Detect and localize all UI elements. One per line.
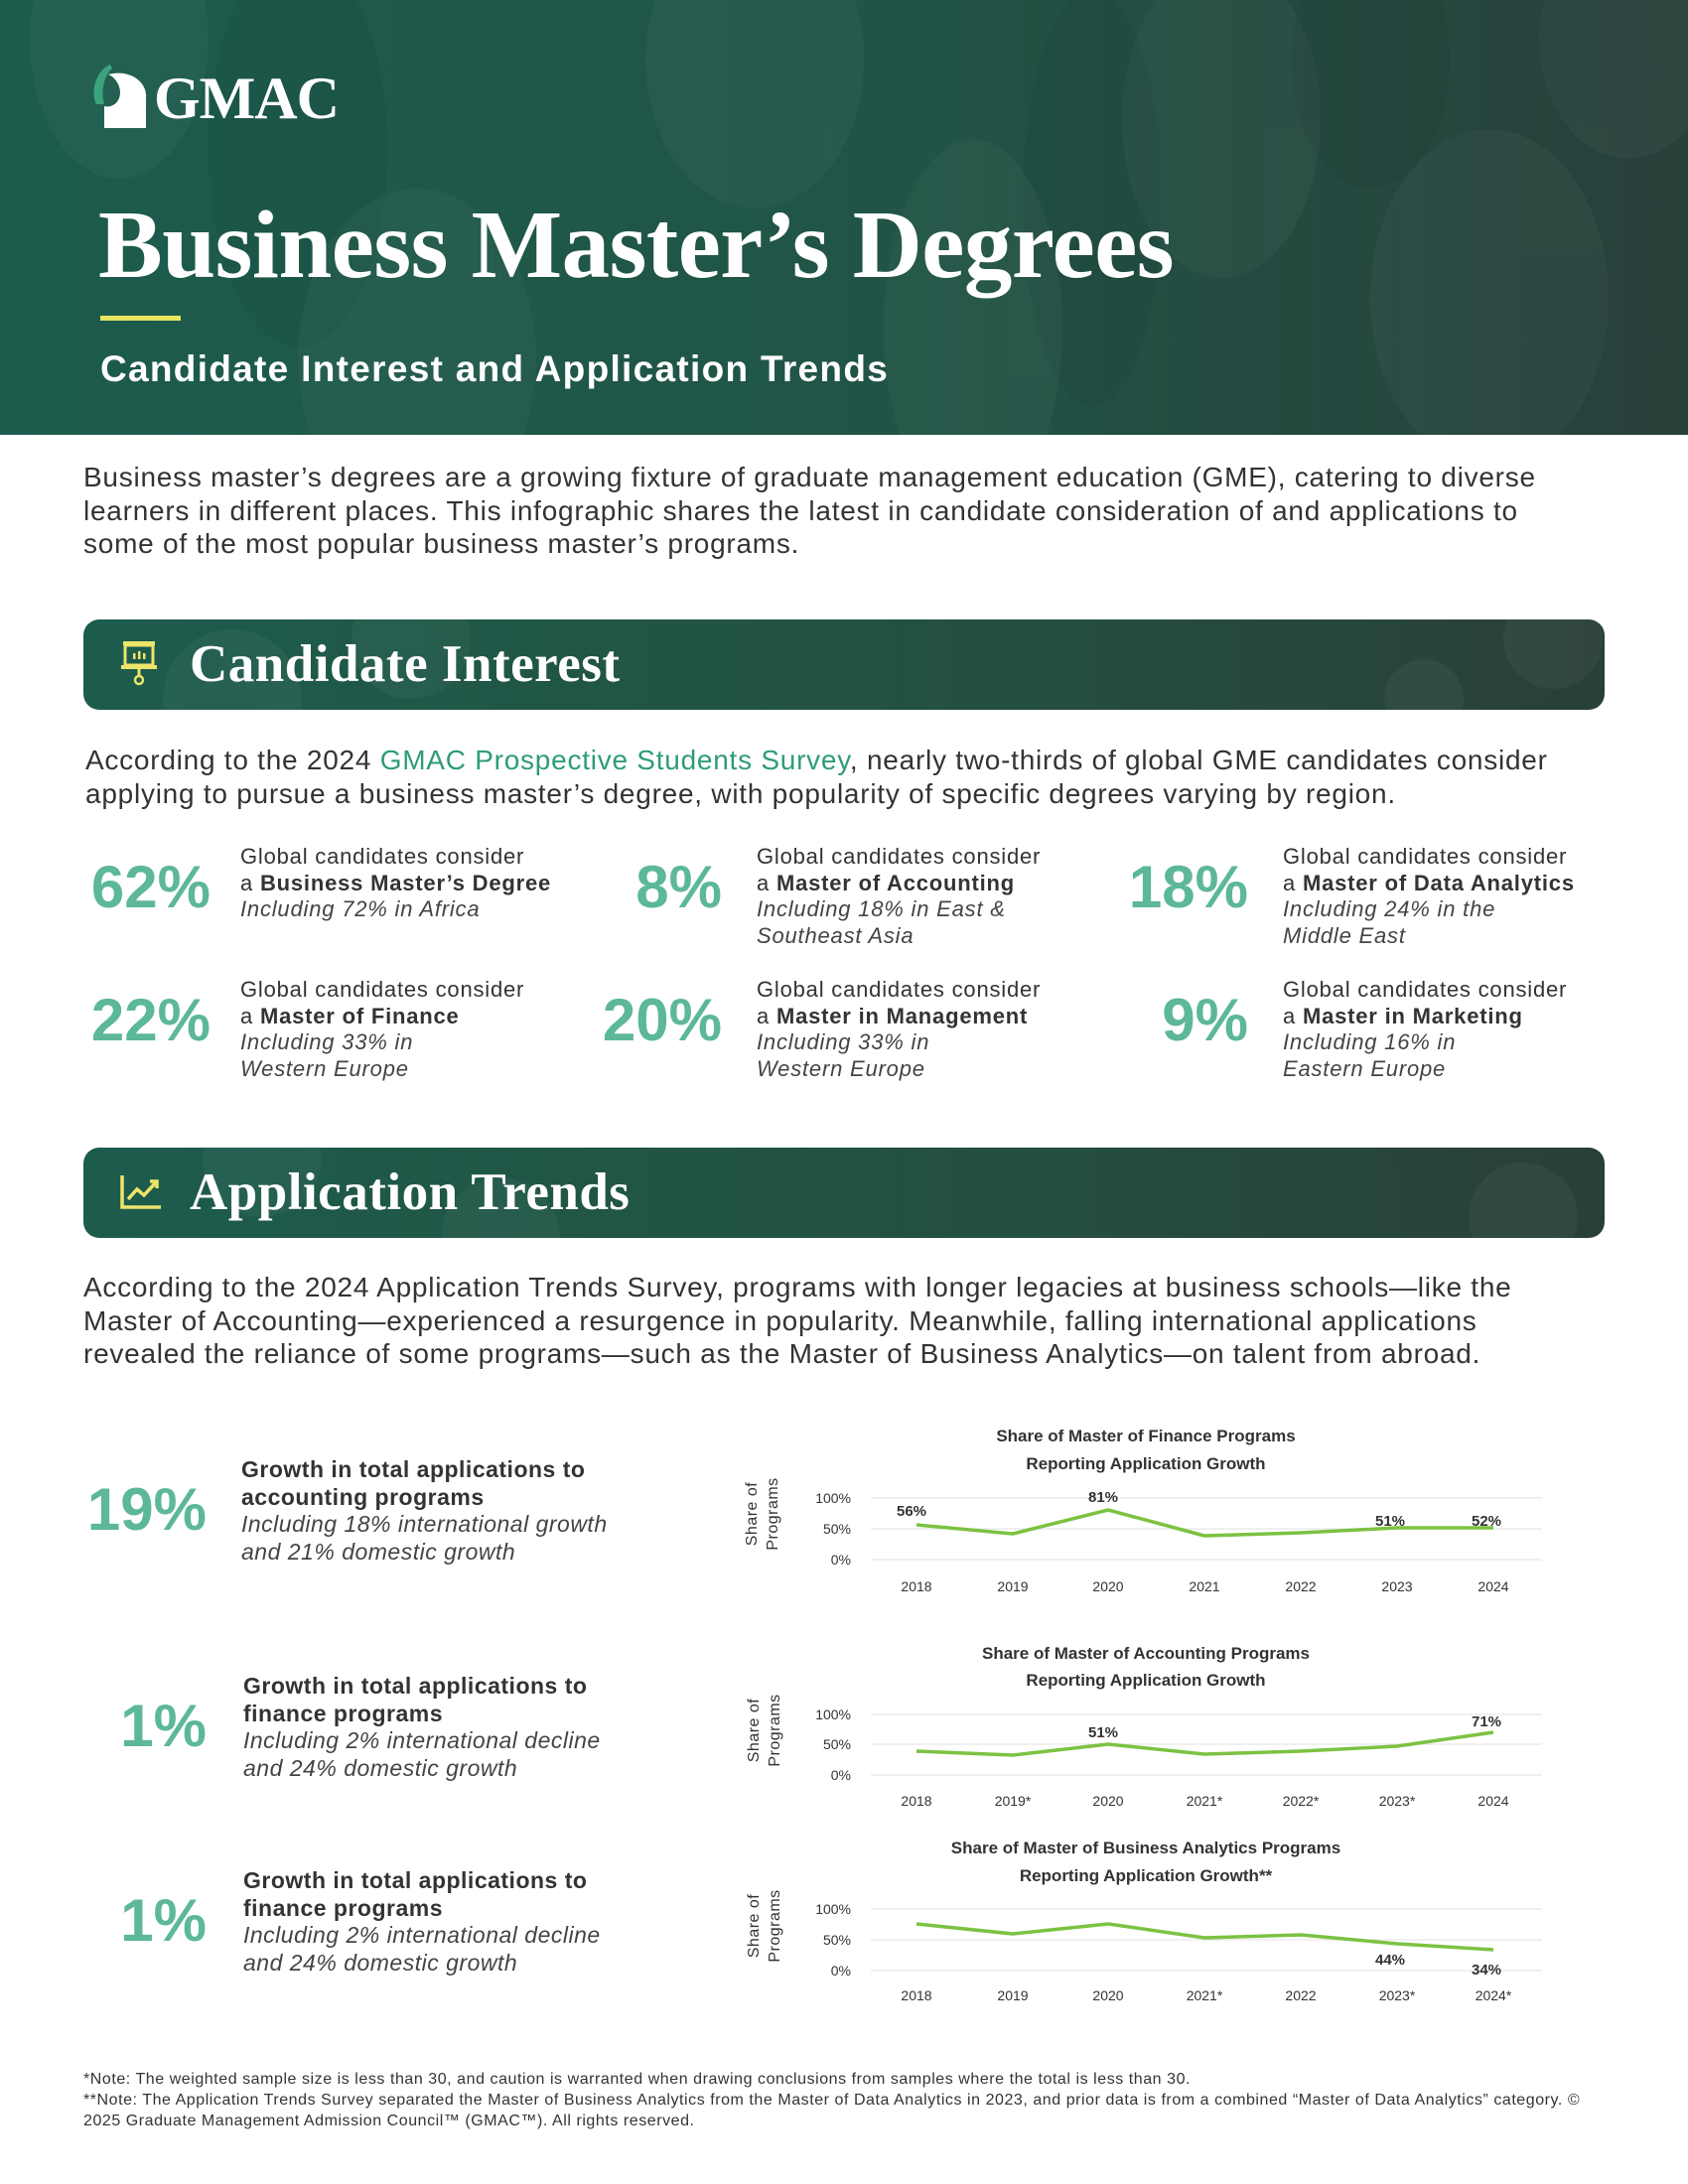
- stat: 18%: Global candidates consider: [1283, 844, 1567, 869]
- chart: Master of Finance: Share of: [744, 1482, 761, 1546]
- stat: 19% accounting growth: and 21% domestic growth: [241, 1539, 515, 1565]
- stat: 1% finance growth (repeat): [120, 1867, 601, 1976]
- chart: Master of Finance: Programs: [765, 1477, 781, 1551]
- intro paragraph: [83, 462, 1536, 559]
- stat: 8%: Southeast Asia: [757, 923, 914, 947]
- subtitle: Candidate Interest and Application Trends: [100, 348, 889, 389]
- stat: 8%: Global candidates consider: [757, 844, 1041, 869]
- stat: 18%: [1129, 844, 1575, 947]
- chart: Master of Accounting: 2020: [1092, 1793, 1124, 1809]
- stat: 1% finance growth (repeat): Growth in total applications to: [243, 1867, 587, 1893]
- candidate interest paragraph: [85, 745, 1548, 809]
- chart: Master of Accounting: 2018: [901, 1793, 932, 1809]
- title: Business Master’s Degrees: [98, 192, 1174, 298]
- chart: Master of Business Analytics: Share of Master of Business Analytics Programs: [951, 1839, 1340, 1857]
- stat: 9%: Global candidates consider: [1283, 977, 1567, 1002]
- application trends paragraph: revealed the reliance of some programs—such as the Master of Business Analytics—on talent from abroad.: [83, 1338, 1480, 1369]
- stat: 62%: 62%: [91, 854, 211, 920]
- stat: 9%: [1162, 977, 1567, 1080]
- chart: Master of Business Analytics: 44%: [1375, 1952, 1405, 1969]
- logo: GMAC: GMAC: [154, 66, 339, 131]
- icon: presentation board: [121, 641, 157, 685]
- stat: 18%: 18%: [1129, 854, 1248, 920]
- section bar: Candidate Interest: Candidate Interest: [190, 635, 620, 693]
- application trends paragraph: According to the 2024 Application Trends Survey, programs with longer legacies at business schools—like the: [83, 1272, 1511, 1302]
- stat: 18%: Middle East: [1283, 923, 1406, 947]
- chart: Master of Accounting: Share of: [746, 1699, 763, 1762]
- header banner: [0, 0, 1688, 435]
- chart: Master of Finance: 2020: [1092, 1578, 1124, 1594]
- section bar: Application Trends: Application Trends: [190, 1163, 630, 1221]
- chart: Master of Accounting: 2021*: [1187, 1793, 1223, 1809]
- stat: 22%: [91, 977, 524, 1080]
- section bar: Application Trends: [83, 1148, 1605, 1238]
- chart: Master of Business Analytics: [746, 1839, 1542, 2003]
- stat: 9%: Including 16% in: [1283, 1029, 1456, 1054]
- stat: 19% accounting growth: accounting programs: [241, 1483, 485, 1509]
- candidate interest paragraph: applying to pursue a business master’s degree, with popularity of specific degrees varying by region.: [85, 778, 1396, 808]
- stat: 8%: 8%: [635, 854, 722, 920]
- chart: Master of Business Analytics: 2024*: [1476, 1987, 1512, 2003]
- chart: Master of Finance: 2023: [1381, 1578, 1413, 1594]
- stat: 18%: a Master of Data Analytics: [1283, 870, 1575, 895]
- chart: Master of Business Analytics: 2018: [901, 1987, 932, 2003]
- stat: 1% finance growth: Including 2% international decline: [243, 1727, 601, 1753]
- section bar: Candidate Interest: [83, 619, 1605, 710]
- stat: 20%: 20%: [603, 987, 722, 1053]
- stat: 1% finance growth: 1%: [120, 1693, 207, 1759]
- chart: Master of Finance: 0%: [831, 1552, 851, 1568]
- stat: 9%: Eastern Europe: [1283, 1056, 1446, 1080]
- chart: Master of Accounting: 51%: [1088, 1724, 1118, 1741]
- candidate interest paragraph: According to the 2024 GMAC Prospective Students Survey, nearly two-thirds of global GME candidates consider: [85, 745, 1548, 775]
- chart: Master of Finance: Share of Master of Finance Programs: [996, 1427, 1296, 1445]
- footnotes: 2025 Graduate Management Admission Council™ (GMAC™). All rights reserved.: [83, 2113, 695, 2129]
- stat: 1% finance growth: Growth in total applications to: [243, 1673, 587, 1699]
- chart: Master of Business Analytics: 2020: [1092, 1987, 1124, 2003]
- stat: 1% finance growth (repeat): 1%: [120, 1887, 207, 1954]
- chart: Master of Accounting: 2023*: [1379, 1793, 1416, 1809]
- chart: Master of Accounting: 71%: [1472, 1713, 1501, 1730]
- chart: Master of Finance: 81%: [1088, 1489, 1118, 1506]
- stat: 22%: 22%: [91, 987, 211, 1053]
- stat: 20%: Global candidates consider: [757, 977, 1041, 1002]
- stat: 22%: Including 33% in: [240, 1029, 413, 1054]
- stat: 62%: Global candidates consider: [240, 844, 524, 869]
- stat: 8%: Including 18% in East &: [757, 896, 1006, 921]
- chart: Master of Accounting: Programs: [767, 1694, 783, 1767]
- application trends paragraph: Master of Accounting—experienced a resurgence in popularity. Meanwhile, falling international applications: [83, 1304, 1477, 1336]
- stat: 20%: Including 33% in: [757, 1029, 929, 1054]
- chart: Master of Accounting: 2019*: [995, 1793, 1032, 1809]
- stat: 62%: [91, 844, 551, 921]
- intro paragraph: learners in different places. This infographic shares the latest in candidate consideration of and applications to: [83, 494, 1518, 526]
- chart: Master of Finance: 100%: [815, 1490, 851, 1506]
- footnotes: *Note: The weighted sample size is less than 30, and caution is warranted when drawing conclusions from samples where the total is less than 30.: [83, 2071, 1191, 2088]
- stat: 22%: Global candidates consider: [240, 977, 524, 1002]
- stat: 20%: a Master in Management: [757, 1003, 1028, 1028]
- stat: 20%: [603, 977, 1041, 1080]
- chart: Master of Business Analytics: 100%: [815, 1901, 851, 1917]
- chart: Master of Accounting: Reporting Application Growth: [1026, 1671, 1266, 1690]
- stat: 9%: a Master in Marketing: [1283, 1003, 1523, 1028]
- chart: Master of Accounting: Share of Master of Accounting Programs: [982, 1644, 1310, 1663]
- stat: 20%: Western Europe: [757, 1056, 925, 1080]
- stat: 22%: a Master of Finance: [240, 1003, 460, 1028]
- stat: 8%: [635, 844, 1041, 947]
- stat: 22%: Western Europe: [240, 1056, 409, 1080]
- chart: Master of Finance: 2022: [1285, 1578, 1317, 1594]
- application trends paragraph: [83, 1272, 1511, 1369]
- stat: 1% finance growth (repeat): finance programs: [243, 1894, 443, 1920]
- stat: 9%: 9%: [1162, 987, 1248, 1053]
- stat: 19% accounting growth: [87, 1456, 608, 1565]
- intro paragraph: Business master’s degrees are a growing fixture of graduate management education (GME), catering to diverse: [83, 462, 1536, 492]
- footnotes: [83, 2071, 1580, 2129]
- stat: 18%: Including 24% in the: [1283, 896, 1495, 921]
- chart: Master of Accounting: [746, 1644, 1542, 1809]
- chart: Master of Business Analytics: 2022: [1285, 1987, 1317, 2003]
- chart: Master of Business Analytics: Reporting Application Growth**: [1020, 1866, 1273, 1885]
- chart: Master of Finance: 2024: [1477, 1578, 1509, 1594]
- chart: Master of Finance: 50%: [823, 1521, 851, 1537]
- chart: Master of Accounting: 2024: [1477, 1793, 1509, 1809]
- chart: Master of Finance: 51%: [1375, 1513, 1405, 1530]
- chart: Master of Business Analytics: 50%: [823, 1932, 851, 1948]
- chart: Master of Accounting: 50%: [823, 1736, 851, 1752]
- stat: 19% accounting growth: 19%: [87, 1476, 207, 1543]
- chart: Master of Accounting: 0%: [831, 1767, 851, 1783]
- chart: Master of Business Analytics: 2021*: [1187, 1987, 1223, 2003]
- chart: Master of Business Analytics: 34%: [1472, 1962, 1501, 1979]
- chart: Master of Finance: Reporting Application Growth: [1026, 1454, 1266, 1473]
- stat: 1% finance growth (repeat): and 24% domestic growth: [243, 1950, 517, 1976]
- chart: Master of Business Analytics: 2019: [997, 1987, 1029, 2003]
- chart: Master of Accounting: 100%: [815, 1706, 851, 1722]
- chart: Master of Business Analytics: Share of: [746, 1894, 763, 1958]
- stat: 8%: a Master of Accounting: [757, 870, 1015, 895]
- chart: Master of Finance: 52%: [1472, 1513, 1501, 1530]
- stat: 19% accounting growth: Including 18% international growth: [241, 1511, 608, 1537]
- stat: 1% finance growth: finance programs: [243, 1700, 443, 1725]
- chart: Master of Finance: 2018: [901, 1578, 932, 1594]
- chart: Master of Finance: [744, 1427, 1542, 1594]
- stat: 62%: Including 72% in Africa: [240, 896, 480, 921]
- stat: 1% finance growth: [120, 1673, 601, 1781]
- stat: 62%: a Business Master’s Degree: [240, 870, 551, 895]
- stat: 19% accounting growth: Growth in total applications to: [241, 1456, 585, 1482]
- chart: Master of Business Analytics: 0%: [831, 1963, 851, 1979]
- chart: Master of Accounting: 2022*: [1283, 1793, 1320, 1809]
- chart: Master of Finance: 2021: [1189, 1578, 1220, 1594]
- stat: 1% finance growth (repeat): Including 2% international decline: [243, 1922, 601, 1948]
- icon: trend line: [120, 1175, 161, 1209]
- chart: Master of Business Analytics: 2023*: [1379, 1987, 1416, 2003]
- chart: Master of Finance: 56%: [897, 1503, 926, 1520]
- intro paragraph: some of the most popular business master’s programs.: [83, 528, 799, 559]
- chart: Master of Finance: 2019: [997, 1578, 1029, 1594]
- footnotes: **Note: The Application Trends Survey separated the Master of Business Analytics from the Master of Data Analytics in 2023, and prior data is from a combined “Master of Data Analytics” category. ©: [83, 2092, 1580, 2109]
- chart: Master of Business Analytics: Programs: [767, 1889, 783, 1963]
- stat: 1% finance growth: and 24% domestic growth: [243, 1755, 517, 1781]
